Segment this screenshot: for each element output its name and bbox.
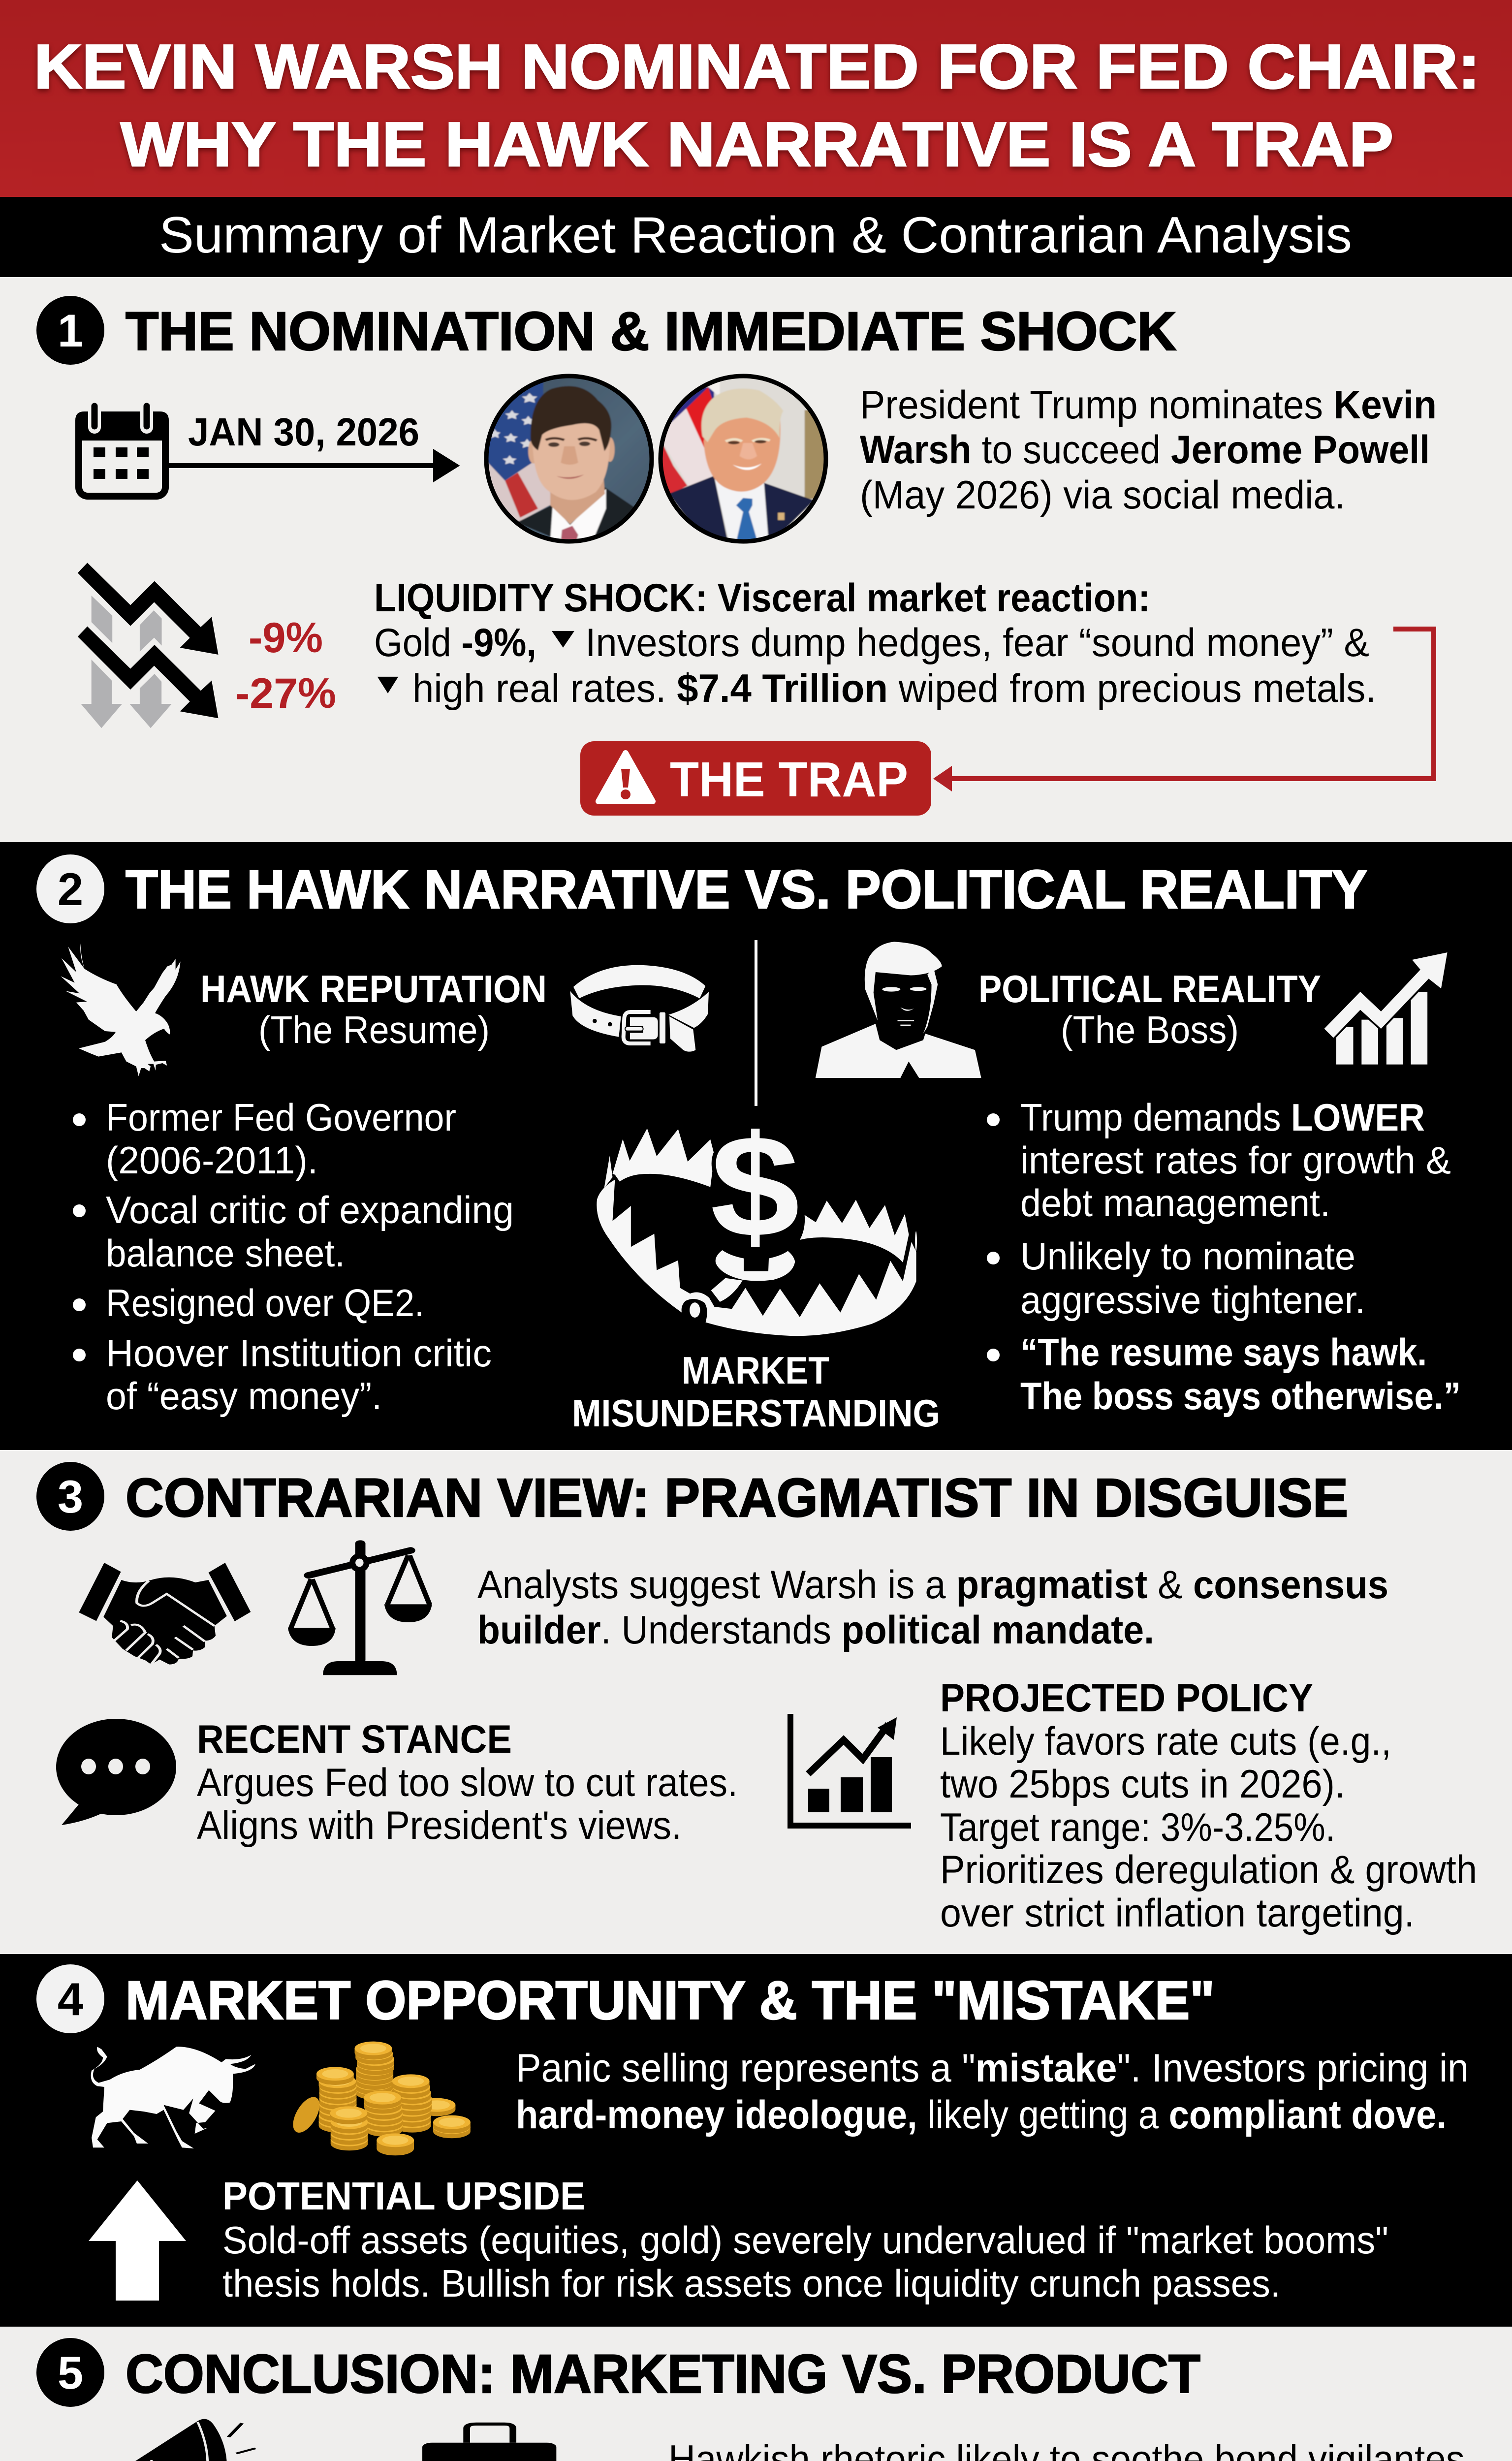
icon: bear trap with dollar sign: $ bbox=[710, 1105, 800, 1267]
icon: bull bbox=[91, 2047, 255, 2148]
analyst text: builder. Understands political mandate. bbox=[477, 1608, 1154, 1652]
section 4 number badge: 4 bbox=[58, 1973, 83, 2025]
left bullet list bbox=[73, 1096, 514, 1418]
panel: section 3 contrarian view bbox=[0, 1450, 1512, 1954]
section 2 number badge bbox=[36, 854, 104, 923]
section 2 heading: THE HAWK NARRATIVE VS. POLITICAL REALITY bbox=[126, 859, 1367, 920]
section 1 number badge: 1 bbox=[58, 305, 83, 356]
icon: belt bbox=[570, 965, 709, 1052]
panel: section 1 nomination and shock bbox=[0, 277, 1512, 843]
section 1 number badge bbox=[36, 296, 104, 365]
stat: minus 9 percent: -9% bbox=[249, 614, 323, 662]
section 1 heading: THE NOMINATION & IMMEDIATE SHOCK bbox=[126, 301, 1176, 362]
liquidity shock text: LIQUIDITY SHOCK: Visceral market reaction: bbox=[374, 576, 1150, 620]
title: KEVIN WARSH NOMINATED FOR FED CHAIR: bbox=[34, 32, 1480, 101]
right bullet list: aggressive tightener. bbox=[1020, 1278, 1365, 1322]
potential upside text: POTENTIAL UPSIDE bbox=[222, 2174, 585, 2218]
header: title banner bbox=[0, 0, 1512, 197]
right bullet list: The boss says otherwise.” bbox=[1020, 1374, 1461, 1418]
stat: minus 27 percent: -27% bbox=[235, 670, 336, 717]
trap caption bbox=[572, 1349, 940, 1435]
trap caption: MISUNDERSTANDING bbox=[572, 1391, 940, 1435]
recent stance text bbox=[197, 1717, 738, 1848]
left bullet list: balance sheet. bbox=[106, 1231, 345, 1275]
left column heading bbox=[200, 967, 547, 1051]
subtitle bar bbox=[0, 197, 1512, 277]
section 5 heading: CONCLUSION: MARKETING VS. PRODUCT bbox=[126, 2344, 1200, 2404]
recent stance text: RECENT STANCE bbox=[197, 1717, 512, 1762]
liquidity shock text bbox=[370, 576, 1376, 711]
icon: Trump silhouette bbox=[816, 942, 981, 1078]
section 4 number badge bbox=[36, 1964, 104, 2033]
potential upside text: Sold-off assets (equities, gold) severely undervalued if "market booms" bbox=[222, 2218, 1388, 2262]
potential upside text: thesis holds. Bullish for risk assets once liquidity crunch passes. bbox=[222, 2262, 1281, 2305]
trap caption: MARKET bbox=[682, 1349, 829, 1392]
projected policy text bbox=[940, 1676, 1477, 1935]
analyst text: Analysts suggest Warsh is a pragmatist & consensus bbox=[477, 1563, 1388, 1607]
divider line bbox=[755, 940, 757, 1106]
mistake text bbox=[516, 2046, 1469, 2137]
left bullet list: Former Fed Governor bbox=[106, 1096, 456, 1139]
portrait: Donald Trump bbox=[659, 374, 830, 545]
icon: eagle bbox=[61, 944, 181, 1076]
icon: handshake bbox=[79, 1563, 251, 1665]
section 2 number badge: 2 bbox=[58, 863, 83, 915]
title: WHY THE HAWK NARRATIVE IS A TRAP bbox=[121, 109, 1393, 179]
icon: bear trap with dollar sign bbox=[597, 1105, 917, 1336]
icon: scales of justice bbox=[288, 1540, 432, 1675]
left bullet list: (2006-2011). bbox=[106, 1138, 318, 1182]
right bullet list bbox=[987, 1096, 1461, 1418]
icon: speech bubble bbox=[56, 1719, 176, 1825]
liquidity shock text: Investors dump hedges, fear “sound money” & bbox=[585, 621, 1369, 665]
left bullet list: Hoover Institution critic bbox=[106, 1331, 492, 1375]
arrow: shock to the trap bbox=[933, 629, 1434, 791]
arrow: date to portraits bbox=[169, 453, 455, 478]
left column heading: HAWK REPUTATION bbox=[200, 967, 547, 1010]
callout: the trap badge bbox=[580, 741, 931, 816]
section 5 number badge: 5 bbox=[58, 2347, 83, 2398]
mistake text: hard-money ideologue, likely getting a compliant dove. bbox=[516, 2093, 1447, 2137]
panel: section 2 hawk narrative vs reality bbox=[0, 842, 1512, 1450]
potential upside text bbox=[222, 2174, 1388, 2305]
right column heading bbox=[978, 967, 1321, 1051]
date label: JAN 30, 2026 bbox=[188, 410, 419, 454]
projected policy text: Prioritizes deregulation & growth bbox=[940, 1848, 1477, 1892]
icon: briefcase bbox=[422, 2424, 556, 2461]
right bullet list: debt management. bbox=[1020, 1181, 1330, 1225]
analyst text bbox=[477, 1563, 1388, 1652]
liquidity shock text: ▼ bbox=[544, 622, 582, 654]
nomination text: (May 2026) via social media. bbox=[860, 473, 1345, 517]
section 4 heading: MARKET OPPORTUNITY & THE "MISTAKE" bbox=[126, 1970, 1215, 2031]
icon: megaphone bbox=[114, 2419, 255, 2461]
projected policy text: two 25bps cuts in 2026). bbox=[940, 1762, 1345, 1806]
left bullet list: Vocal critic of expanding bbox=[106, 1188, 514, 1231]
icon: policy chart bbox=[788, 1714, 911, 1829]
icon: up arrow bbox=[89, 2180, 186, 2301]
portrait: Kevin Warsh bbox=[482, 374, 656, 545]
left bullet list: Resigned over QE2. bbox=[106, 1281, 424, 1325]
icon: falling market arrows bbox=[78, 563, 219, 728]
right bullet list: “The resume says hawk. bbox=[1020, 1330, 1427, 1374]
panel: section 4 market opportunity bbox=[0, 1954, 1512, 2327]
icon: rising chart bbox=[1324, 952, 1448, 1065]
callout: the trap badge: THE TRAP bbox=[670, 752, 908, 807]
nomination text: Warsh to succeed Jerome Powell bbox=[860, 428, 1430, 472]
right bullet list: Trump demands LOWER bbox=[1020, 1096, 1425, 1139]
projected policy text: Target range: 3%-3.25%. bbox=[940, 1805, 1335, 1850]
title bbox=[34, 32, 1480, 179]
right column heading: POLITICAL REALITY bbox=[978, 967, 1321, 1010]
right bullet list: Unlikely to nominate bbox=[1020, 1234, 1355, 1278]
section 5 number badge bbox=[36, 2338, 104, 2407]
projected policy text: over strict inflation targeting. bbox=[940, 1891, 1415, 1935]
recent stance text: Aligns with President's views. bbox=[197, 1803, 682, 1848]
section 3 heading: CONTRARIAN VIEW: PRAGMATIST IN DISGUISE bbox=[126, 1468, 1348, 1528]
left bullet list: of “easy money”. bbox=[106, 1374, 382, 1418]
icon: gold coins bbox=[288, 2042, 471, 2155]
liquidity shock text: high real rates. $7.4 Trillion wiped from precious metals. bbox=[412, 666, 1376, 711]
left column heading: (The Resume) bbox=[258, 1008, 490, 1051]
subtitle bar: Summary of Market Reaction & Contrarian Analysis bbox=[159, 207, 1352, 264]
right bullet list: interest rates for growth & bbox=[1020, 1138, 1451, 1182]
icon: calendar bbox=[75, 406, 169, 496]
section 3 number badge: 3 bbox=[58, 1471, 83, 1522]
nomination text bbox=[860, 383, 1437, 517]
mistake text: Panic selling represents a "mistake". Investors pricing in bbox=[516, 2046, 1469, 2090]
nomination text: President Trump nominates Kevin bbox=[860, 383, 1437, 427]
recent stance text: Argues Fed too slow to cut rates. bbox=[197, 1761, 738, 1805]
right column heading: (The Boss) bbox=[1061, 1008, 1239, 1051]
section 3 number badge bbox=[36, 1462, 104, 1531]
projected policy text: PROJECTED POLICY bbox=[940, 1676, 1313, 1720]
panel: section 5 conclusion bbox=[0, 2327, 1512, 2461]
projected policy text: Likely favors rate cuts (e.g., bbox=[940, 1719, 1391, 1764]
liquidity shock text: ▼ bbox=[370, 667, 406, 699]
liquidity shock text: Gold -9%, bbox=[374, 621, 536, 665]
